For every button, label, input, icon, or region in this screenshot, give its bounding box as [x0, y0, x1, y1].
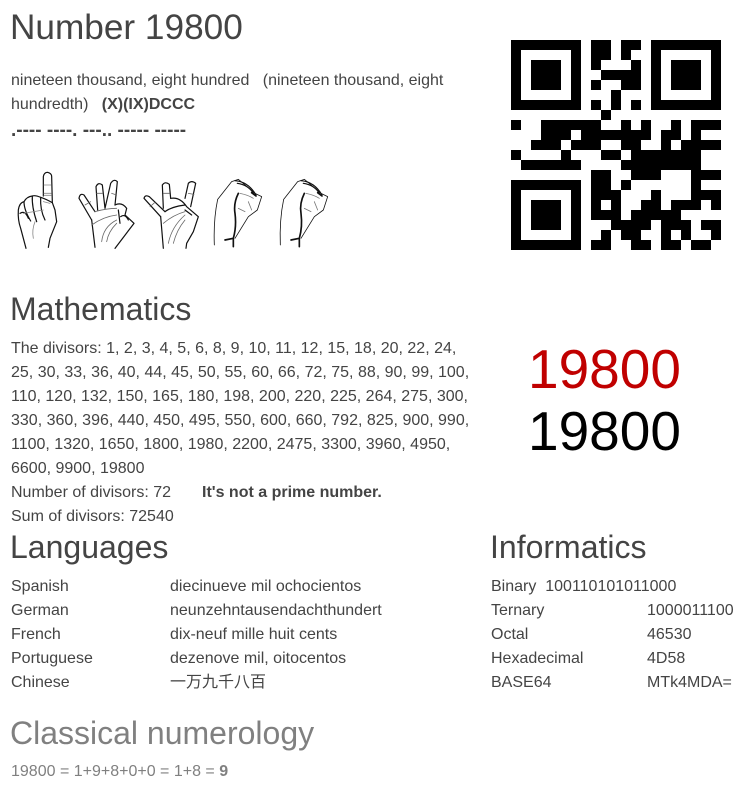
sign language hands: [18, 172, 328, 249]
hand: digit 0: [214, 179, 262, 247]
divisors list: The divisors: 1, 2, 3, 4, 5, 6, 8, 9, 10, 11, 12, 15, 18, 20, 22, 24,: [11, 340, 456, 357]
languages table: Portuguese: [11, 650, 93, 667]
divisors list: [11, 340, 469, 477]
informatics table: [491, 578, 734, 691]
heading: Classical numerology: Classical numerology: [10, 715, 314, 751]
hand: digit 0: [280, 179, 328, 247]
informatics table: Ternary: [491, 602, 544, 619]
languages table: French: [11, 626, 61, 643]
languages table: Chinese: [11, 674, 70, 691]
divisors list: 110, 120, 132, 150, 165, 180, 198, 200, 220, 225, 264, 275, 300,: [11, 388, 468, 405]
numerology calculation: 19800 = 1+9+8+0+0 = 1+8 = 9: [11, 763, 228, 780]
informatics table: 46530: [647, 626, 692, 643]
QR code: [511, 40, 721, 250]
languages table: 一万九千八百: [170, 674, 266, 691]
number name text: hundredth) (X)(IX)DCCC: [11, 96, 195, 113]
title: Number 19800: [10, 8, 243, 47]
languages table: Spanish: [11, 578, 69, 595]
divisors list: 6600, 9900, 19800: [11, 460, 144, 477]
languages table: [11, 578, 382, 691]
divisors list: 25, 30, 33, 36, 40, 44, 45, 50, 55, 60, 66, 72, 75, 88, 90, 99, 100,: [11, 364, 469, 381]
hand: digit 1: [18, 172, 57, 248]
informatics table: Octal: [491, 626, 528, 643]
divisors list: 330, 360, 396, 440, 450, 495, 550, 600, 660, 792, 825, 900, 990,: [11, 412, 469, 429]
informatics table: 4D58: [647, 650, 685, 667]
languages table: dezenove mil, oitocentos: [170, 650, 346, 667]
languages table: neunzehntausendachthundert: [170, 602, 382, 619]
informatics table: Binary 100110101011000: [491, 578, 676, 595]
large red number: 19800: [528, 338, 681, 400]
heading: Informatics: Informatics: [490, 529, 646, 565]
morse code: .---- ----. ---.. ----- -----: [11, 120, 186, 141]
languages table: dix-neuf mille huit cents: [170, 626, 337, 643]
divisors list: 1100, 1320, 1650, 1800, 1980, 2200, 2475, 3300, 3960, 4950,: [11, 436, 450, 453]
languages table: diecinueve mil ochocientos: [170, 578, 361, 595]
informatics table: 1000011100: [647, 602, 734, 619]
informatics table: Hexadecimal: [491, 650, 583, 667]
heading: Mathematics: Mathematics: [10, 291, 191, 327]
sum of divisors: Sum of divisors: 72540: [11, 508, 174, 525]
hand: digit 9: [79, 180, 134, 248]
heading: Languages: Languages: [10, 529, 168, 565]
informatics table: MTk4MDA=: [647, 674, 732, 691]
prime status: It's not a prime number.: [202, 484, 382, 501]
informatics table: BASE64: [491, 674, 551, 691]
languages table: German: [11, 602, 69, 619]
number name text: [11, 72, 444, 113]
hand: digit 8: [144, 182, 198, 248]
number of divisors: Number of divisors: 72: [11, 484, 171, 501]
number name text: nineteen thousand, eight hundred (nineteen thousand, eight: [11, 72, 443, 89]
large black number: 19800: [528, 400, 681, 462]
